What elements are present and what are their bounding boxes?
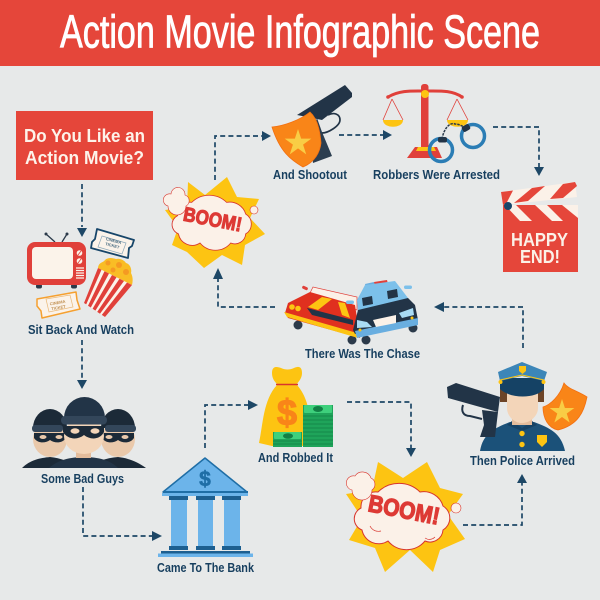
label: and robbed it: And Robbed It: [258, 451, 334, 465]
arrow: chase to boom: [213, 268, 275, 307]
icon: happy end clapperboard: [501, 182, 578, 272]
arrow: police to chase: [434, 302, 523, 348]
icon: cinema ticket orange: [37, 292, 80, 318]
question box: Action Movie?: [25, 148, 144, 168]
icon: gun and shield: [272, 85, 352, 167]
icon: police gun: [447, 383, 500, 437]
label: some bad guys: Some Bad Guys: [41, 472, 124, 486]
label: sit back and watch: Sit Back And Watch: [28, 323, 134, 337]
icon: boom explosion upper: [163, 177, 265, 268]
arrow: bank to money: [205, 400, 258, 448]
arrow: money to boom: [347, 402, 416, 457]
label: came to the bank: Came To The Bank: [157, 561, 254, 575]
arrow: arrested to happy end: [493, 127, 544, 176]
icon: happy end clapperboard: END!: [520, 247, 560, 267]
icon: cinema ticket blue: [91, 229, 134, 258]
icon: bank: $: [199, 468, 211, 491]
label: then police arrived: Then Police Arrived: [470, 454, 575, 468]
icon: bad guys: [22, 397, 146, 468]
arrow: boom to police: [463, 474, 527, 525]
icon: television: [27, 232, 86, 288]
arrow: shootout to arrested: [339, 130, 392, 140]
icon: police officer: [480, 362, 565, 451]
question box: Do You Like an: [24, 126, 145, 146]
icon: popcorn: [84, 258, 133, 317]
icon: police shield: [543, 383, 587, 430]
arrow: bad guys to bank: [83, 487, 162, 541]
icon: handcuffs: [430, 123, 484, 162]
icon: boom explosion lower: BOOM!: [366, 490, 442, 531]
icon: boom explosion upper: BOOM!: [181, 204, 244, 237]
question box: [16, 111, 153, 180]
icon: cinema ticket orange: CINEMA: [49, 299, 66, 306]
arrow: boom to shootout: [215, 131, 271, 180]
icon: cinema ticket orange: TICKET: [51, 304, 67, 311]
icon: crashing cars: [284, 280, 418, 344]
label: there was the chase: There Was The Chase: [305, 347, 420, 361]
icon: bank: [158, 458, 253, 557]
icon: boom explosion lower: [346, 462, 465, 572]
icon: money bag and cash: $: [277, 392, 297, 433]
label: and shootout: And Shootout: [273, 168, 348, 182]
icon: money bag and cash: [259, 367, 333, 447]
arrow: question to watch: [77, 184, 87, 237]
label: robbers were arrested: Robbers Were Arrested: [373, 168, 500, 182]
icon: cinema ticket blue: CINEMA: [105, 236, 122, 245]
icon: scales of justice: [383, 84, 468, 158]
icon: cinema ticket blue: TICKET: [105, 241, 121, 250]
icon: happy end clapperboard: HAPPY: [511, 230, 568, 250]
arrow: watch to bad guys: [77, 340, 87, 389]
